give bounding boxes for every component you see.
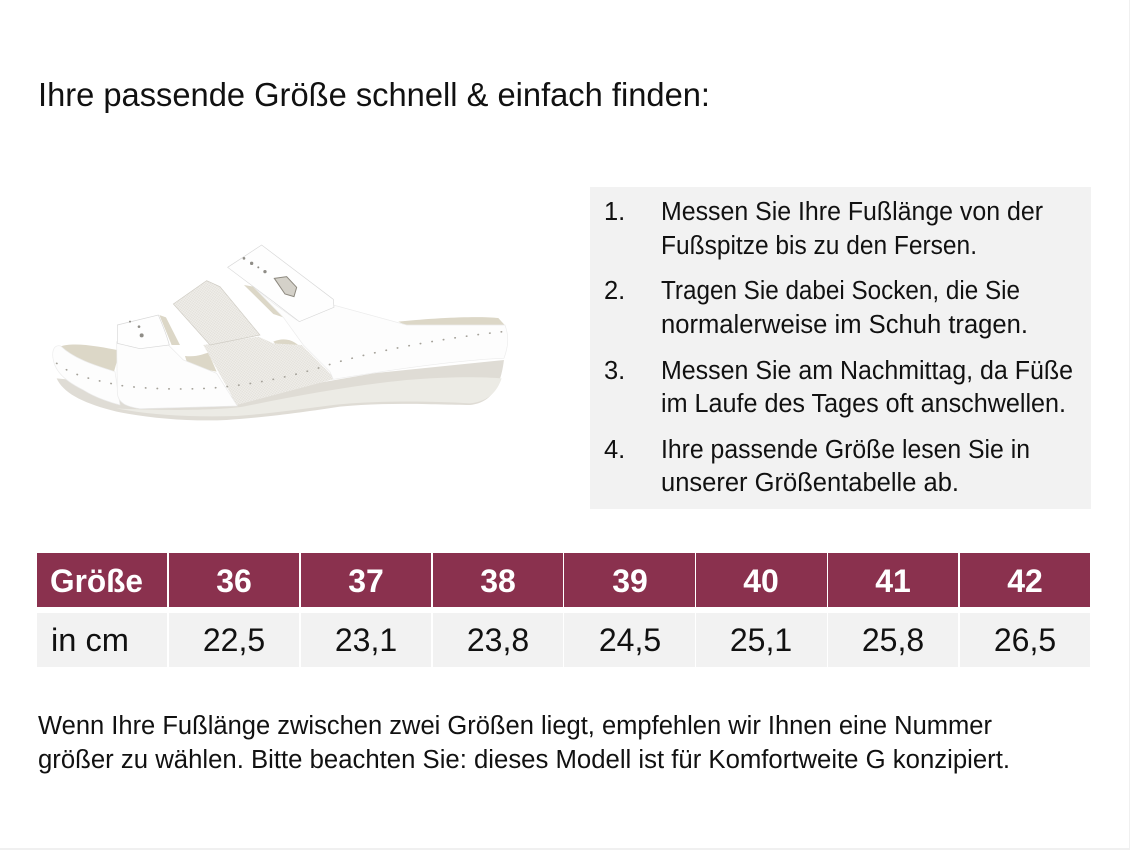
table centimetre row: in cm: [51, 622, 129, 658]
step 3: Messen Sie am Nachmittag, da Füße: [661, 357, 1073, 385]
table centimetre row: 22,5: [203, 622, 265, 658]
step 2: 2.: [604, 277, 625, 305]
step 1: Fußspitze bis zu den Fersen.: [661, 232, 977, 260]
title: Ihre passende Größe schnell & einfach finden:: [38, 76, 710, 113]
table header row: 38: [480, 563, 516, 599]
footnote: [38, 712, 1010, 774]
footbed: [60, 285, 506, 372]
size table: [37, 553, 1090, 667]
table header row: 40: [743, 563, 779, 599]
table centimetre row: 23,8: [467, 622, 529, 658]
step 1: Messen Sie Ihre Fußlänge von der: [661, 198, 1043, 226]
table centimetre row: 24,5: [599, 622, 661, 658]
footnote: größer zu wählen. Bitte beachten Sie: dieses Modell ist für Komfortweite G konzipiert.: [38, 746, 1010, 774]
table header row: [37, 553, 1090, 607]
step 2: Tragen Sie dabei Socken, die Sie: [661, 277, 1020, 305]
panel: measuring instructions: [590, 187, 1091, 509]
front strap: [117, 315, 169, 349]
step 2: [604, 277, 1028, 339]
silver panel: [203, 337, 333, 405]
table centimetre row: [37, 613, 1090, 667]
sole highlight: [117, 377, 502, 416]
stitching: [57, 332, 503, 389]
step 3: [604, 357, 1073, 418]
step 3: im Laufe des Tages oft anschwellen.: [661, 390, 1066, 418]
table header row: 41: [875, 563, 911, 599]
table header row: 42: [1007, 563, 1043, 599]
footbed rim: [53, 346, 120, 405]
rear upper: [253, 287, 508, 379]
step 1: 1.: [604, 198, 625, 226]
sole: [57, 360, 504, 420]
table centimetre row: 25,1: [730, 622, 792, 658]
medallion: [274, 277, 297, 297]
table header row: 39: [612, 563, 648, 599]
footnote: Wenn Ihre Fußlänge zwischen zwei Größen liegt, empfehlen wir Ihnen eine Nummer: [38, 712, 993, 740]
step 4: unserer Größentabelle ab.: [661, 469, 959, 497]
perforations: [129, 257, 267, 337]
step 4: Ihre passende Größe lesen Sie in: [661, 436, 1030, 464]
step 1: [604, 198, 1043, 260]
front upper: [117, 342, 237, 409]
table centimetre row: 23,1: [335, 622, 397, 658]
step 4: [604, 436, 1030, 497]
step 3: 3.: [604, 357, 625, 385]
step 4: 4.: [604, 436, 625, 464]
shoe illustration: white sandal: [53, 245, 508, 420]
table centimetre row: 26,5: [994, 622, 1056, 658]
silver strap: [173, 281, 260, 345]
table header row: 36: [216, 563, 252, 599]
table header row: Größe: [50, 563, 143, 599]
step 2: normalerweise im Schuh tragen.: [661, 311, 1028, 339]
table centimetre row: 25,8: [862, 622, 924, 658]
rear strap: [228, 245, 334, 322]
table header row: 37: [348, 563, 384, 599]
